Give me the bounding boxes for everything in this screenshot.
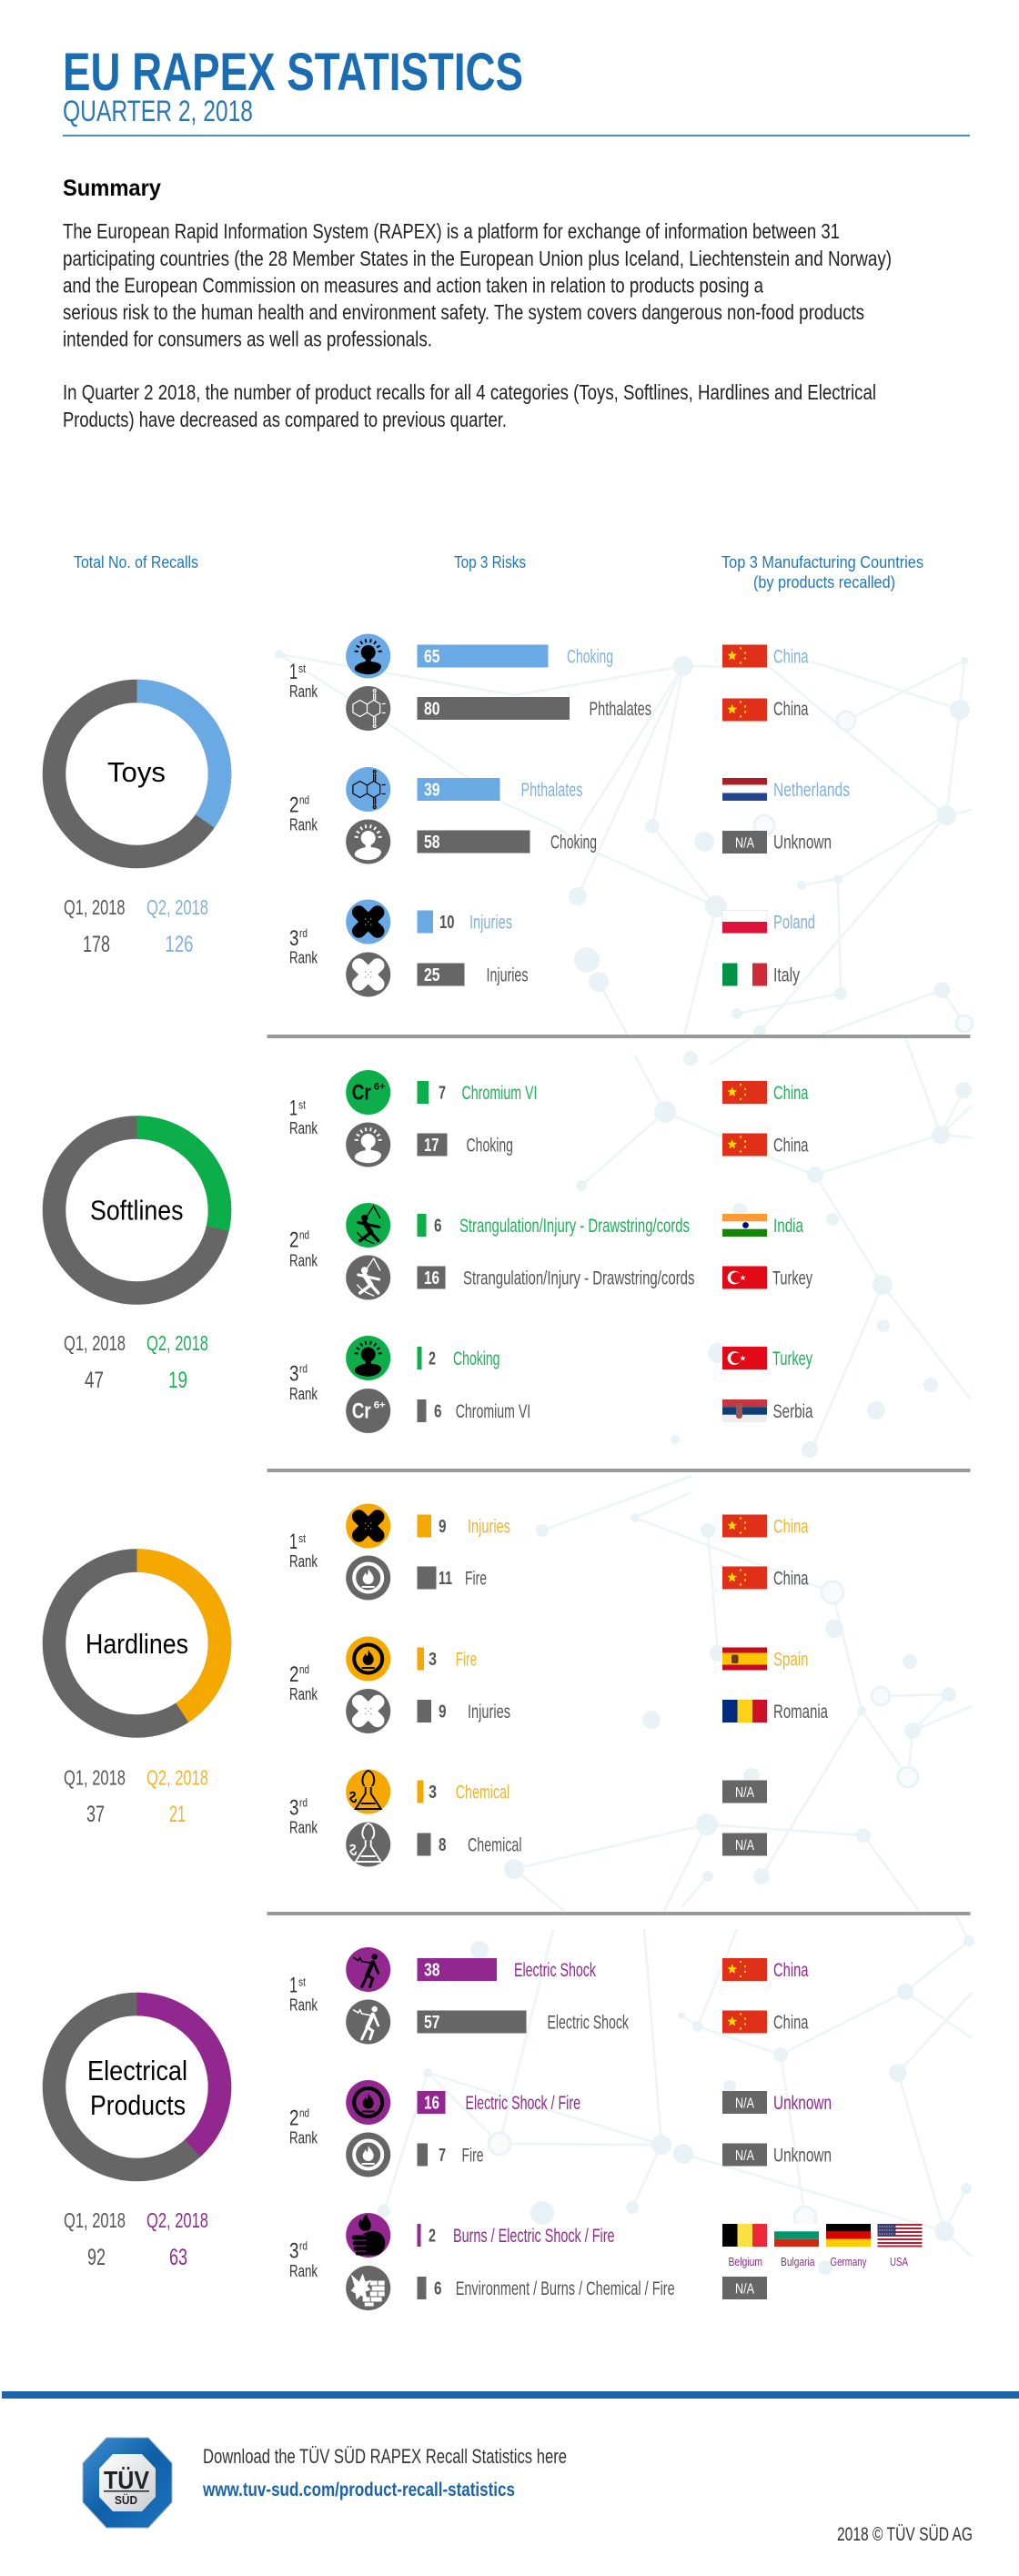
country: China <box>773 646 809 668</box>
bar: 3 <box>417 1647 424 1671</box>
bar: 7 <box>417 1081 429 1104</box>
quarter comparison: 92 <box>87 2245 106 2270</box>
flag: Serbia <box>722 1399 767 1422</box>
value: 38 <box>424 1960 440 1980</box>
country: China <box>773 699 809 720</box>
quarter comparison: Q2, 2018 <box>146 2208 208 2232</box>
value: 9 <box>439 1702 446 1722</box>
quarter comparison: Q2, 2018 <box>146 895 208 919</box>
icon: electric shock <box>346 1947 390 1992</box>
value: 7 <box>439 1083 446 1103</box>
rank 3: Rank <box>289 2262 318 2280</box>
donut chart: hardlines <box>55 1561 220 1726</box>
rank 2: 2 <box>289 1662 298 1687</box>
risk label: Choking <box>550 832 597 854</box>
rank 1: Rank <box>289 1996 318 2015</box>
flag: China <box>722 1081 767 1104</box>
icon: environment <box>346 2266 390 2310</box>
rank 2: 2 <box>289 1228 298 1252</box>
rank 2 <box>289 1228 318 1270</box>
rank 2: Rank <box>289 1685 318 1703</box>
value: 7 <box>439 2146 446 2166</box>
value: 2 <box>429 2226 436 2246</box>
flag: China <box>722 2011 767 2033</box>
row: burns / electric shock / fire Q2 <box>346 2213 923 2268</box>
quarter comparison: Q1, 2018 <box>64 1331 126 1355</box>
risk label: Chromium VI <box>462 1083 537 1104</box>
risk label: Electric Shock <box>514 1960 596 1981</box>
icon: strangulation <box>346 1203 390 1248</box>
country: Unknown <box>773 832 832 854</box>
summary text: and the European Commission on measures and action taken in relation to products posing a <box>63 273 763 297</box>
rank 2: 2 <box>289 793 298 817</box>
risk label: Strangulation/Injury - Drawstring/cords <box>459 1216 690 1237</box>
icon: chromium VI: 6+ <box>374 1399 386 1410</box>
icon: fire <box>346 1636 390 1682</box>
country: Spain <box>773 1649 808 1671</box>
row: choking Q1 <box>346 1123 809 1167</box>
row: choking Q2 <box>346 1336 812 1380</box>
panel: electrical products recalls donut <box>55 2004 220 2270</box>
flag: Netherlands <box>722 778 767 801</box>
panel: electrical products top risks and countries <box>289 1947 923 2310</box>
rank 2: nd <box>299 1228 309 1241</box>
donut label: Products <box>90 2089 186 2121</box>
value: 3 <box>429 1783 437 1803</box>
icon: choking <box>346 1123 390 1167</box>
icon: choking <box>346 1336 390 1380</box>
flags: Belgium, Bulgaria, Germany, USA: Bulgaria <box>781 2255 815 2268</box>
flag: India <box>722 1214 767 1237</box>
value: 16 <box>424 2093 439 2113</box>
risk label: Choking <box>453 1349 500 1369</box>
rank 3: rd <box>299 2238 308 2253</box>
risk label: Chemical <box>468 1834 522 1856</box>
logo: TÜV SÜD: TÜV <box>104 2466 149 2494</box>
donut chart: softlines <box>55 1127 220 1293</box>
country: Serbia <box>773 1401 813 1422</box>
quarter comparison: 47 <box>85 1368 104 1393</box>
column headings <box>74 552 923 591</box>
row: electric shock Q2 <box>346 1947 809 1992</box>
quarter comparison <box>64 1765 208 1827</box>
country: China <box>773 1136 809 1156</box>
value: 6 <box>434 1216 442 1236</box>
country: Unknown <box>773 2146 832 2166</box>
donut label <box>87 2055 187 2121</box>
icon: electric shock <box>346 2000 390 2044</box>
risk label: Injuries <box>468 1702 510 1722</box>
summary text: The European Rapid Information System (RAPEX) is a platform for exchange of information between 31 <box>63 219 840 243</box>
rank 1: 1 <box>289 1096 298 1121</box>
flag: China <box>722 1958 767 1981</box>
rank 1: st <box>298 1097 306 1112</box>
N/A badge <box>722 2091 767 2114</box>
bar: 3 <box>417 1780 424 1803</box>
bar: 16 <box>417 1267 446 1288</box>
summary text: intended for consumers as well as professionals. <box>63 328 432 351</box>
flag: Turkey <box>722 1267 767 1288</box>
country: India <box>773 1216 803 1237</box>
copyright: 2018 © TÜV SÜD AG <box>837 2524 973 2545</box>
row: strangulation Q1 <box>346 1256 812 1299</box>
value: 57 <box>424 2013 440 2033</box>
quarter comparison: Q1, 2018 <box>64 2208 126 2232</box>
rank 2: nd <box>299 1662 309 1676</box>
risk label: Phthalates <box>520 780 582 801</box>
country: Poland <box>773 912 815 934</box>
rank 3: 3 <box>289 1361 298 1387</box>
title: EU RAPEX STATISTICS <box>63 43 523 102</box>
N/A badge: N/A <box>735 1838 754 1854</box>
country: Italy <box>773 965 800 986</box>
rank 3 <box>289 2238 318 2280</box>
bar: 6 <box>417 2277 426 2299</box>
value: 2 <box>429 1349 436 1369</box>
N/A badge: N/A <box>735 2148 754 2164</box>
value: 39 <box>424 781 440 801</box>
rank 2: nd <box>299 2106 309 2120</box>
bar: 38 <box>417 1958 497 1981</box>
row: electric shock Q1 <box>346 2000 809 2044</box>
row: strangulation Q2 <box>346 1203 803 1248</box>
icon: chromium VI <box>346 1070 390 1115</box>
bar: 25 <box>417 963 464 986</box>
quarter comparison: Q1, 2018 <box>64 1765 126 1789</box>
country: China <box>773 2013 809 2033</box>
bar: 2 <box>417 2224 420 2247</box>
rank 1: Rank <box>289 1119 318 1137</box>
rank 1 <box>289 1973 318 2015</box>
row: fire Q2 <box>346 1636 808 1682</box>
rank 2: Rank <box>289 2129 318 2147</box>
rank 1 <box>289 660 318 701</box>
risk label: Strangulation/Injury - Drawstring/cords <box>463 1268 695 1288</box>
value: 11 <box>439 1569 452 1589</box>
bar: 17 <box>417 1134 448 1156</box>
risk label: Electric Shock <box>548 2013 629 2033</box>
risk label: Electric Shock / Fire <box>466 2093 580 2114</box>
row: phthalates Q1 <box>346 686 809 731</box>
rank 2 <box>289 793 318 833</box>
footer band <box>2 2391 1019 2399</box>
rank 3: rd <box>299 1796 308 1809</box>
subtitle: QUARTER 2, 2018 <box>63 95 253 127</box>
rank 2: Rank <box>289 1252 318 1270</box>
donut label: Softlines <box>90 1194 184 1227</box>
icon: chromium VI: Cr <box>352 1399 371 1423</box>
N/A badge: N/A <box>735 835 754 852</box>
N/A badge <box>722 1833 767 1856</box>
N/A badge: N/A <box>735 2096 754 2111</box>
risk label: Chromium VI <box>456 1401 530 1422</box>
flag: Italy <box>722 963 767 986</box>
country: Unknown <box>773 2093 832 2114</box>
risk label: Fire <box>462 2146 484 2166</box>
rank 1: st <box>298 662 306 675</box>
summary text: serious risk to the human health and environment safety. The system covers dangerous non-food products <box>63 300 864 324</box>
quarter comparison <box>64 895 208 957</box>
risk label: Injuries <box>468 1516 510 1538</box>
summary text <box>63 219 892 431</box>
risk label: Phthalates <box>590 699 651 720</box>
rank 1: Rank <box>289 682 318 701</box>
value: 65 <box>424 647 440 667</box>
value: 6 <box>434 2278 442 2298</box>
quarter comparison <box>64 1331 208 1393</box>
icon: chromium VI: Cr <box>352 1081 371 1105</box>
rank 1: 1 <box>289 660 298 684</box>
value: 16 <box>424 1268 439 1288</box>
value: 17 <box>424 1136 439 1156</box>
flag: Poland <box>722 910 767 934</box>
donut chart: toys <box>55 692 220 857</box>
value: 25 <box>424 965 440 985</box>
panel: hardlines recalls donut <box>55 1561 220 1827</box>
donut label: Toys <box>107 756 166 788</box>
value: 58 <box>424 833 440 853</box>
value: 8 <box>439 1835 446 1855</box>
rank 1: st <box>298 1975 306 1989</box>
risk label: Injuries <box>469 912 512 934</box>
rank 3: 3 <box>289 1796 298 1820</box>
icon: phthalates <box>346 767 390 812</box>
value: 3 <box>429 1650 437 1670</box>
bar: 10 <box>417 910 433 934</box>
row: injuries Q1 <box>346 1689 828 1733</box>
country: Turkey <box>772 1349 812 1369</box>
quarter comparison: Q2, 2018 <box>146 1765 208 1789</box>
panel: hardlines top risks and countries <box>289 1503 828 1867</box>
bar: 80 <box>417 697 570 720</box>
quarter comparison: Q1, 2018 <box>64 895 126 919</box>
rank 1 <box>289 1530 318 1571</box>
rank 3: Rank <box>289 1818 318 1836</box>
rank 3 <box>289 1361 318 1403</box>
rank 3: Rank <box>289 1385 318 1403</box>
risk label: Burns / Electric Shock / Fire <box>453 2226 615 2247</box>
flag: Turkey <box>722 1347 767 1369</box>
donut label: Electrical <box>87 2055 187 2086</box>
summary heading: Summary <box>63 176 161 201</box>
download link: www.tuv-sud.com/product-recall-statistics <box>202 2480 515 2500</box>
value: 80 <box>424 699 440 719</box>
flag: Spain <box>722 1647 767 1671</box>
logo: TÜV SÜD <box>83 2438 172 2528</box>
flag: China <box>722 1514 767 1538</box>
quarter comparison: 63 <box>169 2245 187 2270</box>
bar: 6 <box>417 1399 426 1422</box>
N/A badge: N/A <box>735 2282 754 2297</box>
bar: 16 <box>417 2091 446 2114</box>
icon: injuries <box>346 1689 390 1733</box>
flag: China <box>722 1567 767 1589</box>
rank 1: Rank <box>289 1552 318 1571</box>
icon: fire <box>346 2133 390 2177</box>
quarter comparison: 21 <box>169 1802 186 1827</box>
rank 2 <box>289 2106 318 2147</box>
quarter comparison: 126 <box>166 932 193 957</box>
rank 1: 1 <box>289 1530 298 1554</box>
summary text: Products) have decreased as compared to previous quarter. <box>63 408 507 431</box>
panel: toys top risks and countries <box>289 633 850 997</box>
bar: 7 <box>417 2144 428 2166</box>
N/A badge <box>722 2144 767 2166</box>
flags: Belgium, Bulgaria, Germany, USA <box>722 2224 923 2268</box>
flags: Belgium, Bulgaria, Germany, USA: Germany <box>830 2255 867 2268</box>
country: China <box>773 1569 809 1589</box>
icon: chromium VI <box>346 1389 390 1433</box>
panel: softlines recalls donut <box>55 1127 220 1393</box>
row: injuries Q2 <box>346 1503 809 1549</box>
icon: fire <box>346 2080 390 2125</box>
risk label: Injuries <box>486 965 528 986</box>
bar: 6 <box>417 1214 426 1237</box>
flags: Belgium, Bulgaria, Germany, USA: Belgium <box>728 2255 762 2268</box>
country: Turkey <box>772 1268 812 1288</box>
column headings: Top 3 Manufacturing Countries <box>721 552 923 571</box>
N/A badge <box>722 2277 767 2299</box>
rank 1: 1 <box>289 1973 298 1998</box>
bar: 9 <box>417 1700 431 1722</box>
rank 3: 3 <box>289 926 298 951</box>
icon: injuries <box>346 1503 390 1549</box>
panel: softlines top risks and countries <box>289 1070 813 1433</box>
N/A badge <box>722 831 767 854</box>
N/A badge <box>722 1780 767 1803</box>
icon: chemical <box>346 1769 390 1814</box>
flag: China <box>722 699 767 721</box>
row: phthalates Q2 <box>346 767 850 812</box>
risk label: Environment / Burns / Chemical / Fire <box>456 2278 675 2299</box>
row: chemical Q2 <box>346 1769 767 1814</box>
icon: fire <box>346 1556 390 1600</box>
flags: Belgium, Bulgaria, Germany, USA: USA <box>890 2255 908 2268</box>
N/A badge: N/A <box>735 1785 754 1801</box>
row: chemical Q1 <box>346 1822 767 1867</box>
rank 3: rd <box>299 926 308 940</box>
rank 2: nd <box>299 793 309 806</box>
row: chromium VI Q2 <box>346 1070 809 1115</box>
rank 3: 3 <box>289 2238 298 2264</box>
country: Netherlands <box>773 780 850 801</box>
rank 3 <box>289 926 318 966</box>
row: chromium VI Q1 <box>346 1389 813 1433</box>
risk label: Fire <box>465 1569 487 1589</box>
rank 1 <box>289 1096 318 1137</box>
icon: chromium VI: 6+ <box>374 1081 386 1092</box>
icon: phthalates <box>346 686 390 731</box>
value: 9 <box>439 1517 446 1537</box>
rank 2: 2 <box>289 2106 298 2131</box>
bar: 39 <box>417 778 500 801</box>
quarter comparison: 19 <box>168 1368 187 1393</box>
rank 3: rd <box>299 1361 308 1376</box>
quarter comparison <box>64 2208 208 2270</box>
bar: 9 <box>417 1514 431 1538</box>
column headings: (by products recalled) <box>753 572 895 591</box>
quarter comparison: Q2, 2018 <box>146 1331 208 1355</box>
column headings: Total No. of Recalls <box>74 552 198 571</box>
quarter comparison: 37 <box>86 1802 105 1827</box>
country: China <box>773 1960 809 1981</box>
row: fire Q1 <box>346 1556 809 1600</box>
value: 6 <box>434 1401 442 1421</box>
donut label: Hardlines <box>86 1628 188 1660</box>
row: choking Q2 <box>346 633 809 679</box>
quarter comparison: 178 <box>83 932 110 957</box>
rank 3 <box>289 1796 318 1836</box>
flag: Romania <box>722 1700 767 1722</box>
rank 2: Rank <box>289 815 318 833</box>
row: injuries Q1 <box>346 952 800 997</box>
rank 1: st <box>298 1531 306 1545</box>
risk label: Fire <box>456 1649 477 1671</box>
donut chart: electrical products <box>55 2004 220 2169</box>
icon: chemical <box>346 1822 390 1867</box>
row: electric shock / fire Q2 <box>346 2080 832 2125</box>
bar: 11 <box>417 1567 437 1589</box>
risk label: Chemical <box>456 1782 510 1803</box>
country: Romania <box>773 1702 828 1722</box>
icon: choking <box>346 819 390 864</box>
flag: China <box>722 644 767 668</box>
bar: 65 <box>417 644 548 668</box>
bar: 58 <box>417 830 530 854</box>
icon: choking <box>346 633 390 679</box>
row: environment / burns / chemical / fire Q1 <box>346 2266 767 2310</box>
row: choking Q1 <box>346 819 832 864</box>
country: China <box>773 1516 809 1538</box>
icon: injuries <box>346 952 390 997</box>
country: China <box>773 1083 809 1104</box>
bar: 8 <box>417 1833 431 1856</box>
rank 2 <box>289 1662 318 1703</box>
risk label: Choking <box>466 1136 513 1156</box>
rank 3: Rank <box>289 948 318 966</box>
flag: China <box>722 1134 767 1156</box>
risk label: Choking <box>567 646 613 668</box>
icon: injuries <box>346 899 390 945</box>
column headings: Top 3 Risks <box>454 552 526 571</box>
panel: toys recalls donut <box>55 692 220 957</box>
icon: strangulation <box>346 1256 390 1299</box>
row: injuries Q2 <box>346 899 815 945</box>
bar: 2 <box>417 1347 422 1369</box>
download text: Download the TÜV SÜD RAPEX Recall Statistics here <box>203 2445 567 2468</box>
background: molecular network pattern <box>275 650 974 2284</box>
bar: 57 <box>417 2011 526 2033</box>
row: fire Q1 <box>346 2133 832 2177</box>
logo: TÜV SÜD: SÜD <box>115 2493 137 2507</box>
value: 10 <box>439 913 455 933</box>
icon: burns <box>346 2213 390 2258</box>
